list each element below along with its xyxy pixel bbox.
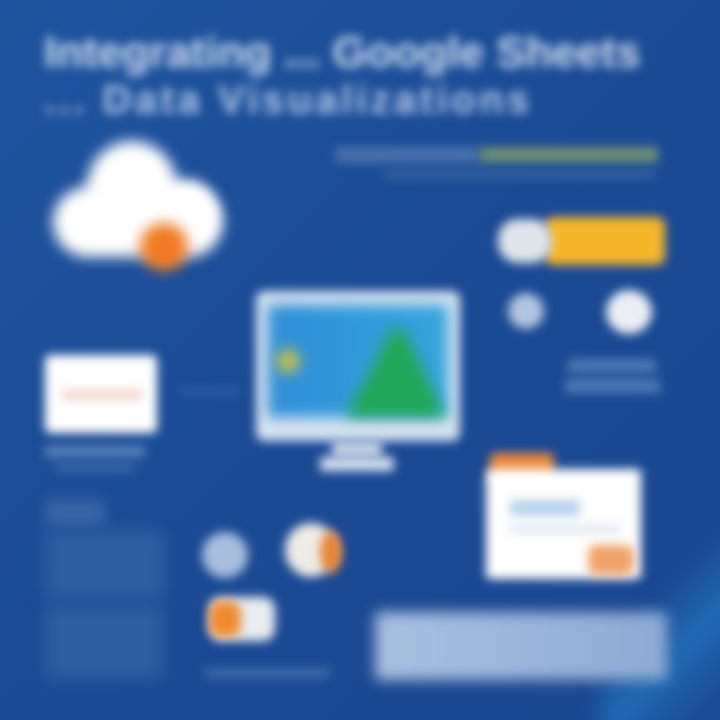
icons: two round nodes — [501, 282, 660, 342]
connector arrow — [180, 388, 240, 394]
title: ... Data Visualizations — [44, 78, 533, 122]
intro text — [331, 141, 664, 181]
icon: cloud with orange badge — [42, 130, 234, 282]
card caption — [40, 441, 150, 474]
background light streak — [600, 440, 720, 720]
panel: bottom callout — [375, 612, 667, 680]
monitor with chart — [248, 283, 468, 479]
chart: green mountain — [266, 320, 452, 428]
caption right — [561, 354, 664, 398]
caption lower — [205, 668, 330, 678]
panel: small white card left — [36, 346, 166, 441]
panel: folder window — [478, 445, 650, 588]
title: Integrating ... Google Sheets — [44, 28, 641, 77]
progress bar: yellow — [490, 209, 673, 273]
icons: round nodes lower — [195, 516, 350, 649]
title — [39, 28, 646, 122]
text column left — [42, 496, 166, 682]
